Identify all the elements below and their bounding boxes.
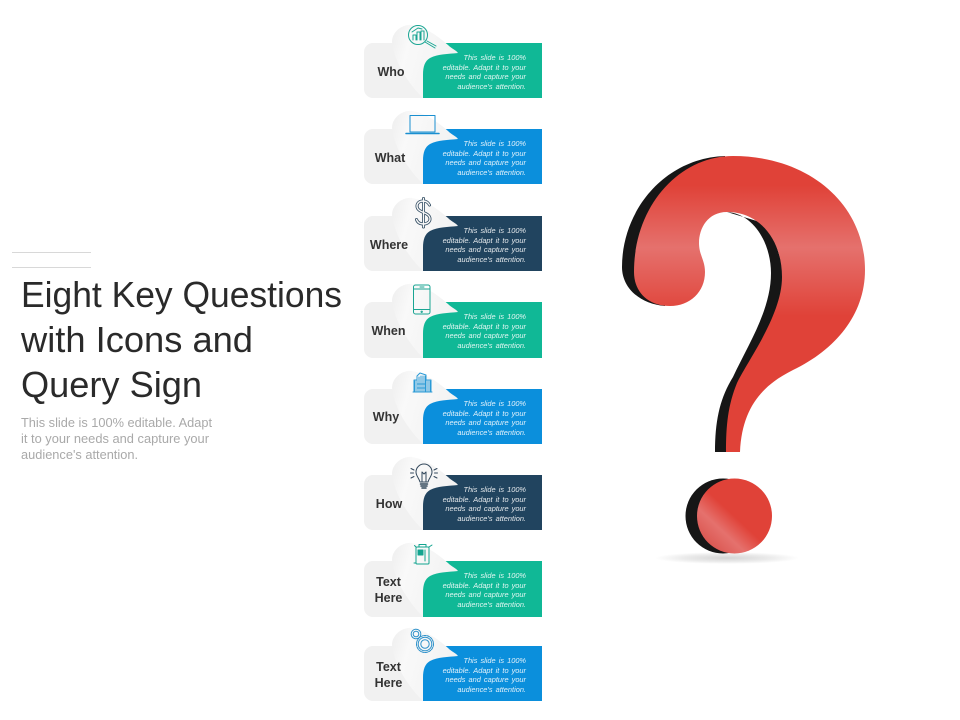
panel text: This slide is 100% — [463, 53, 526, 62]
icon: smartphone — [414, 285, 430, 314]
label: Here — [375, 676, 402, 690]
label: What — [375, 151, 406, 165]
icon: light bulb — [410, 464, 438, 488]
panel text: audience's attention. — [457, 168, 526, 177]
description text — [21, 416, 213, 462]
decorative rule: upper — [12, 252, 91, 253]
shadow under dot — [655, 552, 799, 564]
question mark graphic — [622, 156, 865, 564]
colour panel — [423, 646, 542, 701]
peel — [392, 111, 458, 184]
panel text: This slide is 100% — [463, 571, 526, 580]
panel text: needs and capture your — [445, 504, 527, 513]
icon: dollar sign — [416, 198, 430, 227]
panel text: audience's attention. — [457, 82, 526, 91]
question mark black depth — [622, 156, 790, 452]
panel text: needs and capture your — [445, 72, 527, 81]
panel text — [443, 53, 527, 91]
panel text: needs and capture your — [445, 245, 527, 254]
peel — [392, 371, 458, 444]
label: Here — [375, 591, 402, 605]
label tab — [364, 43, 434, 98]
title: with Icons and — [20, 319, 253, 360]
peel — [392, 628, 458, 701]
colour panel — [423, 389, 542, 444]
panel text — [443, 656, 527, 694]
label tab — [364, 129, 434, 184]
panel text: editable. Adapt it to your — [443, 236, 527, 245]
dot black depth — [686, 478, 760, 554]
label: Why — [373, 410, 399, 424]
row 6: how — [364, 457, 542, 530]
panel text: This slide is 100% — [463, 312, 526, 321]
colour panel — [423, 43, 542, 98]
panel text: editable. Adapt it to your — [443, 581, 527, 590]
description text: it to your needs and capture your — [21, 432, 209, 446]
icon: city buildings — [413, 373, 432, 392]
panel text: This slide is 100% — [463, 399, 526, 408]
peel — [392, 284, 458, 358]
panel text: needs and capture your — [445, 675, 527, 684]
row 2: what — [364, 111, 542, 184]
description text: audience's attention. — [21, 448, 138, 462]
peel — [392, 457, 458, 530]
label: Where — [370, 238, 408, 252]
label tab — [364, 475, 434, 530]
panel text: audience's attention. — [457, 514, 526, 523]
panel text: This slide is 100% — [463, 226, 526, 235]
colour panel — [423, 561, 542, 617]
panel text: needs and capture your — [445, 331, 527, 340]
panel text: editable. Adapt it to your — [443, 495, 527, 504]
title: Query Sign — [21, 364, 202, 405]
colour panel — [423, 216, 542, 271]
panel text: editable. Adapt it to your — [443, 322, 527, 331]
label tab — [364, 216, 434, 271]
row 3: where — [364, 198, 542, 271]
label: Text — [376, 575, 402, 589]
label: How — [376, 497, 402, 511]
label: Who — [377, 65, 405, 79]
panel text: audience's attention. — [457, 600, 526, 609]
panel text: audience's attention. — [457, 428, 526, 437]
icon: laptop — [406, 116, 439, 134]
panel text: This slide is 100% — [463, 656, 526, 665]
question mark body — [634, 156, 865, 452]
panel text: editable. Adapt it to your — [443, 63, 527, 72]
panel text: needs and capture your — [445, 590, 527, 599]
colour panel — [423, 475, 542, 530]
panel text — [443, 139, 527, 177]
panel text — [443, 399, 527, 437]
colour panel — [423, 129, 542, 184]
panel text: This slide is 100% — [463, 485, 526, 494]
label — [375, 575, 402, 605]
decorative rule: lower — [12, 267, 91, 268]
icon: magnifier with chart — [408, 26, 436, 48]
label: When — [371, 324, 406, 338]
label tab — [364, 561, 434, 617]
peel — [392, 198, 458, 271]
label — [375, 660, 402, 690]
dot — [697, 478, 772, 554]
panel text: This slide is 100% — [463, 139, 526, 148]
panel text — [443, 571, 527, 609]
label tab — [364, 302, 434, 358]
row 1: who — [364, 25, 542, 98]
label: Text — [376, 660, 402, 674]
row 5: why — [364, 371, 542, 444]
title: Eight Key Questions — [21, 274, 342, 315]
colour panel — [423, 302, 542, 358]
panel text: audience's attention. — [457, 255, 526, 264]
title — [20, 274, 342, 405]
label tab — [364, 646, 434, 701]
description text: This slide is 100% editable. Adapt — [21, 416, 213, 430]
panel text: editable. Adapt it to your — [443, 666, 527, 675]
row 4: when — [364, 284, 542, 358]
panel text: audience's attention. — [457, 341, 526, 350]
icon: gears — [411, 629, 434, 652]
panel text: editable. Adapt it to your — [443, 149, 527, 158]
panel text: editable. Adapt it to your — [443, 409, 527, 418]
panel text — [443, 312, 527, 350]
panel text: needs and capture your — [445, 418, 527, 427]
panel text: audience's attention. — [457, 685, 526, 694]
label tab — [364, 389, 434, 444]
peel — [392, 25, 458, 98]
row 7: text here — [364, 543, 542, 617]
panel text — [443, 226, 527, 264]
panel text — [443, 485, 527, 523]
peel — [392, 543, 458, 617]
panel text: needs and capture your — [445, 158, 527, 167]
row 8: text here — [364, 628, 542, 701]
icon: clipboard — [414, 544, 432, 564]
